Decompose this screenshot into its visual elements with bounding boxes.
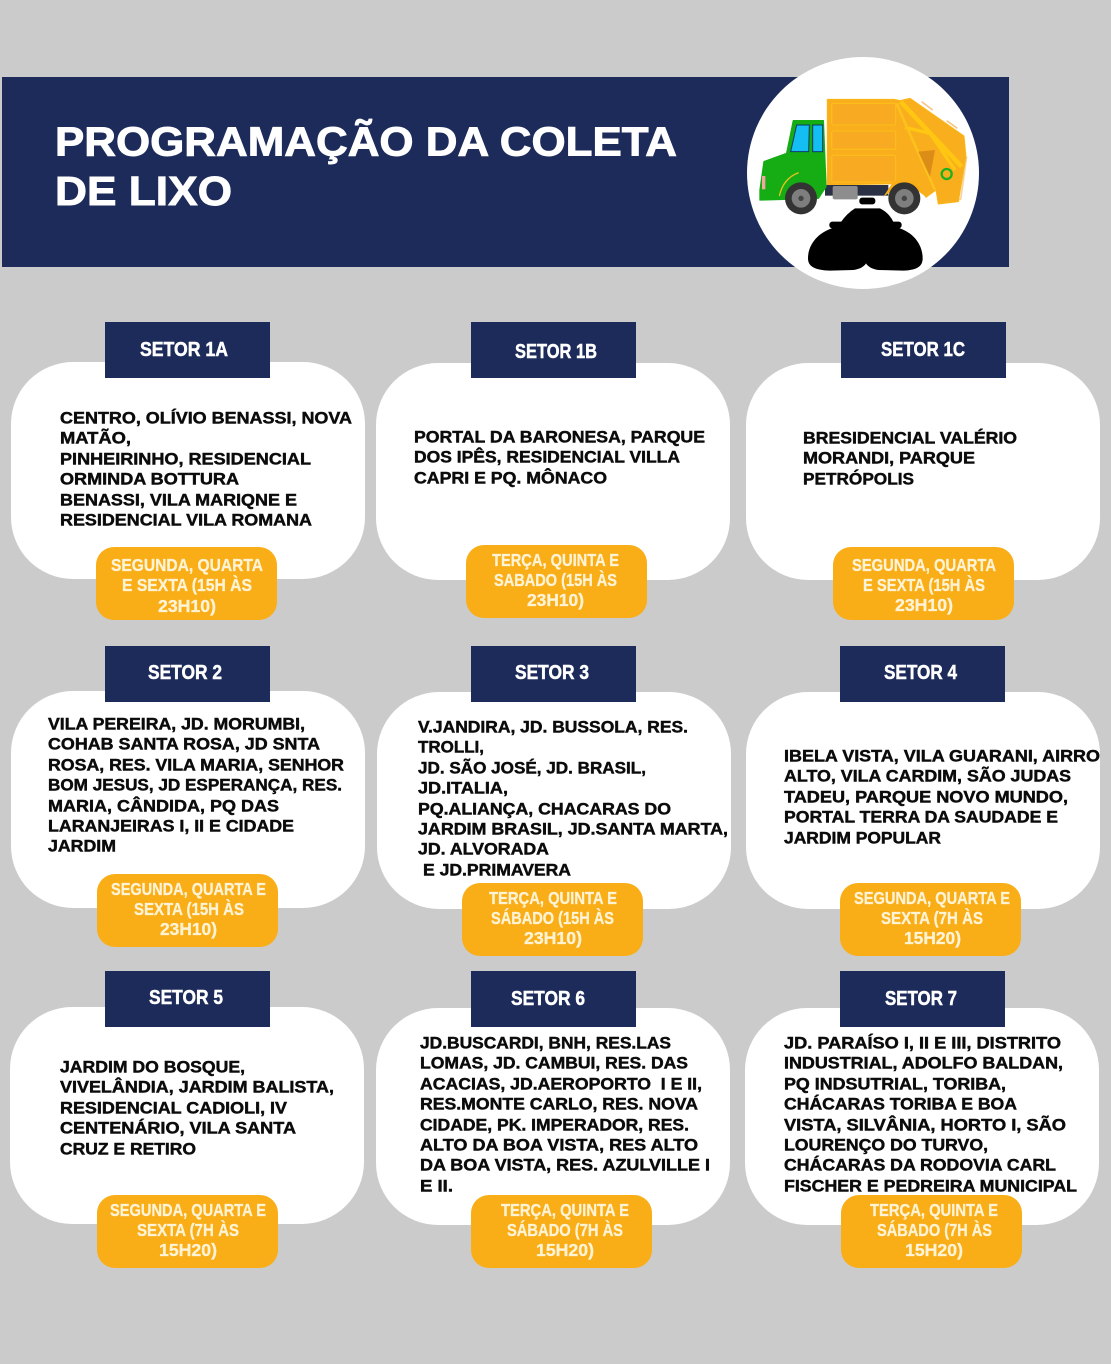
panel: setor 6	[376, 971, 730, 1268]
panel: setor 4: IBELA VISTA, VILA GUARANI, AIRRO	[784, 748, 1100, 766]
panel: setor 3: TROLLI,	[418, 738, 484, 756]
panel: setor 6: SETOR 6	[511, 987, 585, 1010]
panel: setor 2: COHAB SANTA ROSA, JD SNTA	[48, 736, 320, 754]
panel: setor 1C: SEGUNDA, QUARTA	[852, 555, 996, 575]
panel: setor 4: SEGUNDA, QUARTA E	[854, 888, 1010, 908]
panel: setor 7: 15H20)	[905, 1240, 963, 1260]
panel: setor 5: CENTENÁRIO, VILA SANTA	[60, 1118, 296, 1138]
panel: setor 3: SETOR 3	[515, 661, 589, 684]
panel: setor 7: INDUSTRIAL, ADOLFO BALDAN,	[784, 1054, 1063, 1072]
panel: setor 3: JD.ITALIA,	[418, 780, 508, 798]
panel: setor 7: SETOR 7	[885, 987, 957, 1010]
panel: setor 1A	[11, 322, 365, 620]
panel: setor 2: SEXTA (15H ÀS	[134, 898, 244, 919]
panel: setor 1B: TERÇA, QUINTA E	[492, 550, 619, 570]
panel: setor 5: RESIDENCIAL CADIOLI, IV	[60, 1100, 287, 1118]
panel: setor 3: E JD.PRIMAVERA	[423, 862, 571, 880]
panel: setor 6: CIDADE, PK. IMPERADOR, RES.	[420, 1116, 689, 1134]
panel: setor 7: LOURENÇO DO TURVO,	[784, 1136, 988, 1154]
panel: setor 7: JD. PARAÍSO I, II E III, DISTRITO	[784, 1034, 1061, 1052]
panel: setor 1B: SETOR 1B	[515, 340, 597, 363]
panel: setor 4: SEXTA (7H ÀS	[881, 907, 983, 928]
icon: garbage truck and bags in white circle	[747, 57, 979, 289]
panel: setor 7	[745, 971, 1099, 1268]
panel: setor 5: JARDIM DO BOSQUE,	[60, 1058, 245, 1076]
panel: setor 1A: RESIDENCIAL VILA ROMANA	[60, 512, 312, 530]
panel: setor 3: JD. ALVORADA	[418, 840, 549, 858]
panel: setor 7: PQ INDSUTRIAL, TORIBA,	[784, 1076, 1006, 1094]
panel: setor 4: ALTO, VILA CARDIM, SÃO JUDAS	[784, 766, 1071, 786]
panel: setor 2: VILA PEREIRA, JD. MORUMBI,	[48, 716, 305, 734]
panel: setor 6: JD.BUSCARDI, BNH, RES.LAS	[420, 1034, 671, 1052]
panel: setor 6: ALTO DA BOA VISTA, RES ALTO	[420, 1136, 698, 1154]
panel: setor 6: DA BOA VISTA, RES. AZULVILLE I	[420, 1156, 710, 1174]
panel: setor 1A: BENASSI, VILA MARIQNE E	[60, 492, 297, 510]
panel: setor 2: SEGUNDA, QUARTA E	[111, 879, 266, 899]
panel: setor 1A: PINHEIRINHO, RESIDENCIAL	[60, 450, 311, 468]
panel: setor 5: SETOR 5	[149, 986, 223, 1009]
panel: setor 3: 23H10)	[524, 928, 582, 948]
panel: setor 3: TERÇA, QUINTA E	[489, 888, 617, 908]
panel: setor 1B	[376, 322, 730, 618]
panel: setor 1A: SEGUNDA, QUARTA	[111, 555, 263, 575]
panel: setor 1B: 23H10)	[527, 590, 584, 610]
panel: setor 3	[377, 646, 731, 956]
panel: setor 3: SÁBADO (15H ÀS	[491, 907, 614, 928]
panel: setor 2	[11, 646, 365, 947]
title	[55, 118, 677, 214]
panel: setor 7: TERÇA, QUINTA E	[870, 1200, 998, 1220]
panel: setor 2: MARIA, CÂNDIDA, PQ DAS	[48, 796, 279, 816]
panel: setor 6: RES.MONTE CARLO, RES. NOVA	[420, 1096, 698, 1114]
panel: setor 6: 15H20)	[536, 1240, 594, 1260]
panel: setor 1A: ORMINDA BOTTURA	[60, 470, 239, 488]
panel: setor 4: 15H20)	[904, 928, 961, 948]
panel: setor 1C: 23H10)	[895, 595, 953, 615]
panel: setor 1C	[746, 322, 1100, 620]
panel: setor 1B: CAPRI E PQ. MÔNACO	[414, 468, 607, 488]
panel: setor 1B: PORTAL DA BARONESA, PARQUE	[414, 428, 705, 446]
panel: setor 5: CRUZ E RETIRO	[60, 1140, 196, 1158]
panel: setor 6: ACACIAS, JD.AEROPORTO I E II,	[420, 1076, 702, 1094]
panel: setor 5: 15H20)	[159, 1240, 217, 1260]
panel: setor 5: SEGUNDA, QUARTA E	[110, 1200, 266, 1220]
panel: setor 5: VIVELÂNDIA, JARDIM BALISTA,	[60, 1078, 334, 1096]
panel: setor 1C: BRESIDENCIAL VALÉRIO	[803, 428, 1017, 448]
panel: setor 1A: CENTRO, OLÍVIO BENASSI, NOVA	[60, 408, 352, 428]
panel: setor 1A: E SEXTA (15H ÀS	[122, 574, 252, 595]
panel: setor 1C: SETOR 1C	[881, 338, 965, 361]
panel: setor 2: BOM JESUS, JD ESPERANÇA, RES.	[48, 776, 342, 794]
panel: setor 5	[10, 971, 364, 1268]
panel: setor 1A: SETOR 1A	[140, 338, 228, 361]
panel: setor 4: JARDIM POPULAR	[784, 830, 941, 848]
panel: setor 1C: MORANDI, PARQUE	[803, 450, 975, 468]
panel: setor 1B: DOS IPÊS, RESIDENCIAL VILLA	[414, 448, 680, 466]
panel: setor 6: SÁBADO (7H ÀS	[507, 1219, 623, 1240]
title: DE LIXO	[55, 168, 232, 214]
panel: setor 1C: E SEXTA (15H ÀS	[863, 574, 985, 595]
panel: setor 1B: SABADO (15H ÀS	[494, 569, 617, 590]
panel: setor 2: 23H10)	[160, 919, 217, 939]
panel: setor 4: SETOR 4	[884, 661, 957, 684]
panel: setor 2: LARANJEIRAS I, II E CIDADE	[48, 818, 294, 836]
panel: setor 7: VISTA, SILVÂNIA, HORTO I, SÃO	[784, 1114, 1066, 1134]
title: PROGRAMAÇÃO DA COLETA	[55, 118, 677, 164]
panel: setor 1A: 23H10)	[158, 596, 216, 616]
panel: setor 2: ROSA, RES. VILA MARIA, SENHOR	[48, 756, 344, 774]
panel: setor 2: SETOR 2	[148, 661, 222, 684]
panel: setor 5: SEXTA (7H ÀS	[137, 1219, 239, 1240]
panel: setor 1C: PETRÓPOLIS	[803, 470, 914, 488]
panel: setor 3: PQ.ALIANÇA, CHACARAS DO	[418, 800, 671, 818]
panel: setor 3: V.JANDIRA, JD. BUSSOLA, RES.	[418, 718, 688, 736]
panel: setor 6: TERÇA, QUINTA E	[501, 1200, 629, 1220]
panel: setor 7: CHÁCARAS DA RODOVIA CARL	[784, 1156, 1056, 1174]
panel: setor 4	[746, 646, 1100, 956]
header banner	[2, 77, 1009, 267]
panel: setor 7: CHÁCARAS TORIBA E BOA	[784, 1094, 1017, 1114]
panel: setor 3: JD. SÃO JOSÉ, JD. BRASIL,	[418, 758, 646, 778]
panel: setor 6: LOMAS, JD. CAMBUI, RES. DAS	[420, 1054, 688, 1072]
panel: setor 4: PORTAL TERRA DA SAUDADE E	[784, 808, 1058, 826]
panel: setor 1A: MATÃO,	[60, 428, 131, 448]
panel: setor 6: E II.	[420, 1178, 453, 1196]
panel: setor 7: FISCHER E PEDREIRA MUNICIPAL	[784, 1178, 1077, 1196]
panel: setor 2: JARDIM	[48, 838, 116, 856]
panel: setor 4: TADEU, PARQUE NOVO MUNDO,	[784, 788, 1068, 806]
panel: setor 3: JARDIM BRASIL, JD.SANTA MARTA,	[418, 820, 728, 838]
panel: setor 7: SÁBADO (7H ÀS	[877, 1219, 992, 1240]
